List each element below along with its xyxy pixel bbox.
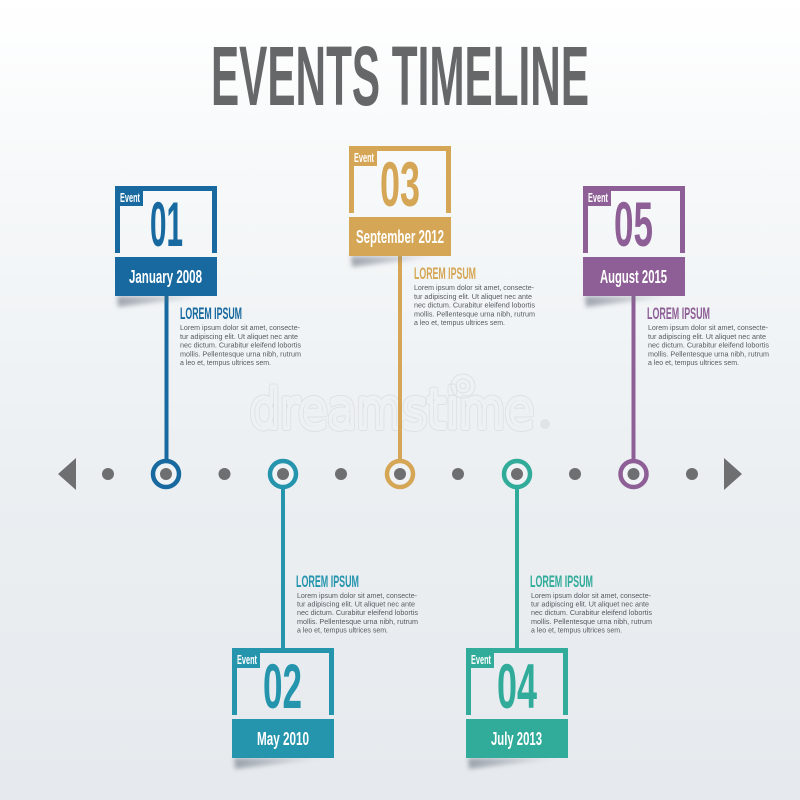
- description 05: LOREM IPSUM: [647, 305, 710, 323]
- connector 05: [632, 296, 636, 464]
- description 04: LOREM IPSUM: [530, 573, 593, 591]
- description 04: tur adipiscing elit. Ut aliquet nec ante: [531, 602, 649, 609]
- description 05: nec dictum. Curabitur eleifend lobortis: [648, 342, 770, 350]
- description 04: nec dictum. Curabitur eleifend lobortis: [531, 610, 653, 617]
- card 01: Event: [120, 191, 140, 205]
- arrow: right: [724, 458, 742, 490]
- description 01: tur adipiscing elit. Ut aliquet nec ante: [180, 334, 298, 341]
- description 04: Lorem ipsum dolor sit amet, consecte-: [531, 593, 652, 600]
- card 01: [115, 186, 217, 307]
- card 05: Event: [588, 191, 608, 205]
- description 04: [530, 573, 653, 635]
- card 03: September 2012: [356, 226, 444, 247]
- description 02: LOREM IPSUM: [296, 573, 359, 591]
- event 01: [115, 186, 302, 487]
- description 02: tur adipiscing elit. Ut aliquet nec ante: [297, 602, 415, 609]
- description 03: [414, 265, 536, 327]
- card 02: Event: [237, 653, 257, 667]
- card 02: [232, 648, 334, 769]
- description 05: [647, 305, 770, 367]
- description 05: Lorem ipsum dolor sit amet, consecte-: [648, 325, 769, 332]
- card 01: 01: [150, 190, 183, 260]
- card 04: [466, 648, 568, 769]
- description 03: a leo et, tempus ultrices sem.: [414, 320, 505, 327]
- card 04: 04: [497, 652, 537, 722]
- event 02: [232, 461, 419, 769]
- axis dots: [102, 468, 698, 480]
- watermark: dreamstime: [250, 378, 534, 441]
- description 01: Lorem ipsum dolor sit amet, consecte-: [180, 325, 301, 332]
- card 03: Event: [354, 151, 374, 165]
- description 04: mollis. Pellentesque urna nibh, rutrum: [531, 619, 652, 626]
- description 01: nec dictum. Curabitur eleifend lobortis: [180, 342, 302, 350]
- description 05: a leo et, tempus ultrices sem.: [648, 360, 739, 367]
- node 05: [620, 461, 646, 487]
- card 02: May 2010: [257, 728, 309, 749]
- node 03: [387, 461, 413, 487]
- description 05: tur adipiscing elit. Ut aliquet nec ante: [648, 334, 766, 341]
- description 01: LOREM IPSUM: [180, 305, 242, 323]
- description 02: [296, 573, 419, 635]
- card 05: 05: [614, 190, 653, 260]
- description 05: mollis. Pellentesque urna nibh, rutrum: [648, 352, 769, 358]
- connector 02: [281, 484, 285, 649]
- connector 04: [515, 484, 519, 649]
- event 03: [349, 146, 536, 487]
- connector 01: [164, 296, 168, 464]
- description 01: mollis. Pellentesque urna nibh, rutrum: [180, 352, 301, 358]
- card 02: 02: [263, 652, 302, 722]
- event 04: [466, 461, 653, 769]
- event 05: [583, 186, 770, 487]
- description 03: nec dictum. Curabitur eleifend lobortis: [414, 302, 536, 310]
- description 02: nec dictum. Curabitur eleifend lobortis: [297, 610, 419, 617]
- node 02: [270, 461, 296, 487]
- card 05: August 2015: [600, 266, 667, 287]
- card 03: 03: [380, 150, 420, 220]
- arrow: left: [58, 458, 76, 490]
- description 03: Lorem ipsum dolor sit amet, consecte-: [414, 285, 535, 292]
- node 04: [504, 461, 530, 487]
- node 01: [153, 461, 179, 487]
- description 03: LOREM IPSUM: [414, 265, 476, 283]
- watermark: dreamstime: [250, 378, 534, 441]
- description 01: a leo et, tempus ultrices sem.: [180, 360, 271, 367]
- connector 03: [398, 256, 402, 464]
- description 02: Lorem ipsum dolor sit amet, consecte-: [297, 593, 418, 600]
- description 01: [180, 305, 302, 367]
- description 02: a leo et, tempus ultrices sem.: [297, 628, 388, 635]
- description 02: mollis. Pellentesque urna nibh, rutrum: [297, 619, 418, 626]
- timeline axis: [58, 458, 742, 490]
- card 04: July 2013: [491, 728, 542, 749]
- description 04: a leo et, tempus ultrices sem.: [531, 628, 622, 635]
- description 03: mollis. Pellentesque urna nibh, rutrum: [414, 312, 535, 318]
- card 01: January 2008: [129, 266, 202, 287]
- description 03: tur adipiscing elit. Ut aliquet nec ante: [414, 294, 532, 301]
- card 03: [349, 146, 451, 267]
- card 04: Event: [471, 653, 491, 667]
- card 05: [583, 186, 685, 307]
